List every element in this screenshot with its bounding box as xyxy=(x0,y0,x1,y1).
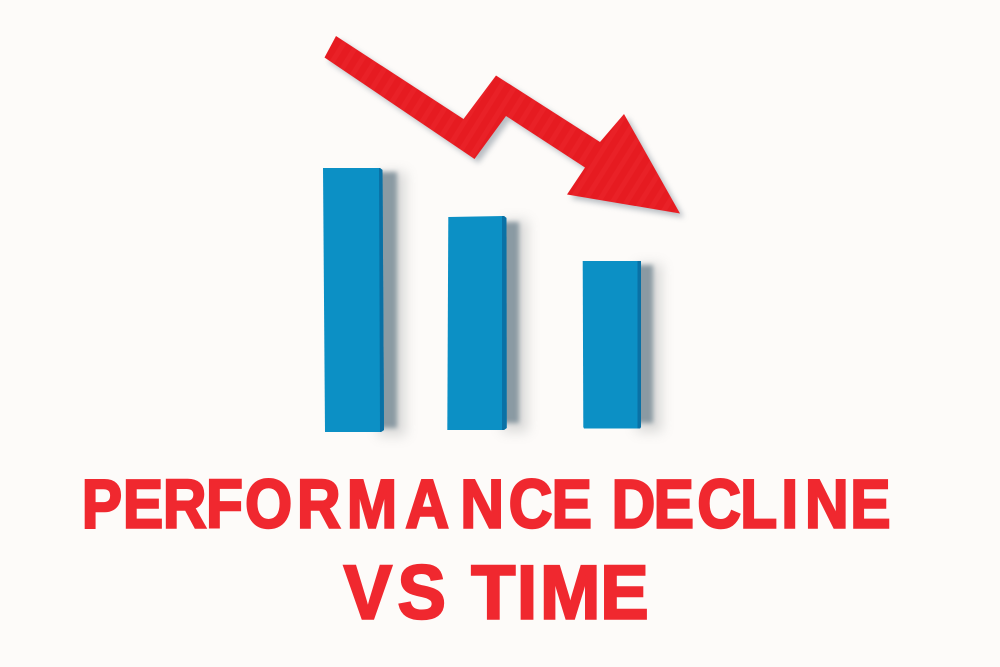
title line 1: PERFORMANCE DECLINE xyxy=(82,465,891,543)
bar 1 xyxy=(323,168,406,436)
bar 2 xyxy=(447,216,528,432)
bar chart xyxy=(323,168,662,436)
title line 2: VS TIME xyxy=(344,550,649,635)
title xyxy=(82,465,891,635)
arrow: downward trend xyxy=(324,36,684,218)
bar 3 xyxy=(583,261,662,432)
